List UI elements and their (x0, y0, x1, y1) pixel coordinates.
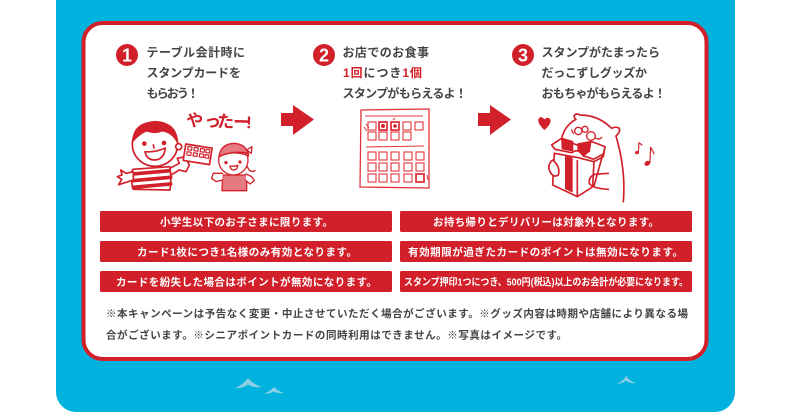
text: footnotes: 合がございます。※シニアポイントカードの同時利用はできません。※写真はイメージです。 (106, 328, 567, 342)
text: footnotes: ※本キャンペーンは予告なく変更・中止させていただく場合がございます。※グッズ内容は時期や店舗により異なる場 (106, 307, 688, 320)
icon: children with stamp card (117, 122, 255, 191)
icon: number 2: 2 (319, 46, 329, 66)
text: step 1 description: テーブル会計時に (146, 44, 245, 60)
panel: white card with red border (84, 23, 706, 359)
text: step 2 description: スタンプがもらえるよ！ (342, 86, 467, 100)
panel: conditions left column: カードを紛失した場合はポイントが無効になります。 (116, 276, 377, 288)
text: step 1 description: スタンプカードを (146, 66, 241, 80)
text: step 3 description: スタンプがたまったら (542, 44, 660, 60)
text: step 2 description: お店でのお食事 (342, 44, 429, 60)
music notes (638, 143, 642, 153)
panel: conditions right column: お持ち帰りとデリバリーは対象外となります。 (433, 216, 659, 228)
icon: waves (235, 376, 636, 394)
boy head (132, 122, 182, 166)
heart (538, 117, 551, 130)
step 3 (512, 44, 666, 202)
gift box (553, 147, 605, 197)
icon: number 2 (313, 44, 335, 66)
icon: number 1 (116, 44, 138, 66)
arrow: step 1 to 2 (281, 105, 314, 135)
panel: conditions left column: 小学生以下のお子さまに限ります。 (160, 216, 333, 228)
text: footnotes (106, 307, 688, 342)
text: step 3 description: だっこずしグッズか (542, 65, 647, 80)
text: step 1 description: もらおう！ (146, 86, 199, 100)
text: step 2 description: 1回につき1個 (343, 66, 422, 80)
boy body (117, 157, 189, 190)
arrow: step 2 to 3 (478, 105, 511, 135)
icon: number 1: 1 (122, 46, 132, 66)
icon: number 3: 3 (518, 46, 528, 66)
bow (561, 137, 592, 157)
stamp card (183, 144, 212, 165)
panel: conditions left column (100, 211, 392, 292)
girl (212, 143, 255, 191)
otter body (562, 114, 624, 202)
icon: stamp card (360, 109, 429, 188)
step 1 (116, 44, 255, 191)
panel: conditions left column: カード1枚につき1名様のみ有効となります。 (137, 246, 357, 258)
panel: conditions right column (400, 211, 692, 292)
text: yatta exclamation: やったー! (186, 111, 252, 132)
panel: conditions right column: スタンプ押印1つにつき、500円(税込)以上のお会計が必要になります。 (404, 276, 688, 288)
icon: number 3 (512, 44, 534, 66)
panel: conditions right column: 有効期限が過ぎたカードのポイントは無効になります。 (408, 246, 683, 258)
step 2 (313, 44, 467, 188)
text: step 3 description (542, 44, 666, 100)
icon: otter with gift (538, 114, 654, 202)
text: step 1 description (146, 44, 245, 100)
paws (549, 160, 559, 176)
text: step 3 description: おもちゃがもらえるよ！ (542, 86, 666, 100)
text: step 2 description (342, 44, 467, 100)
glasses face (572, 126, 602, 140)
